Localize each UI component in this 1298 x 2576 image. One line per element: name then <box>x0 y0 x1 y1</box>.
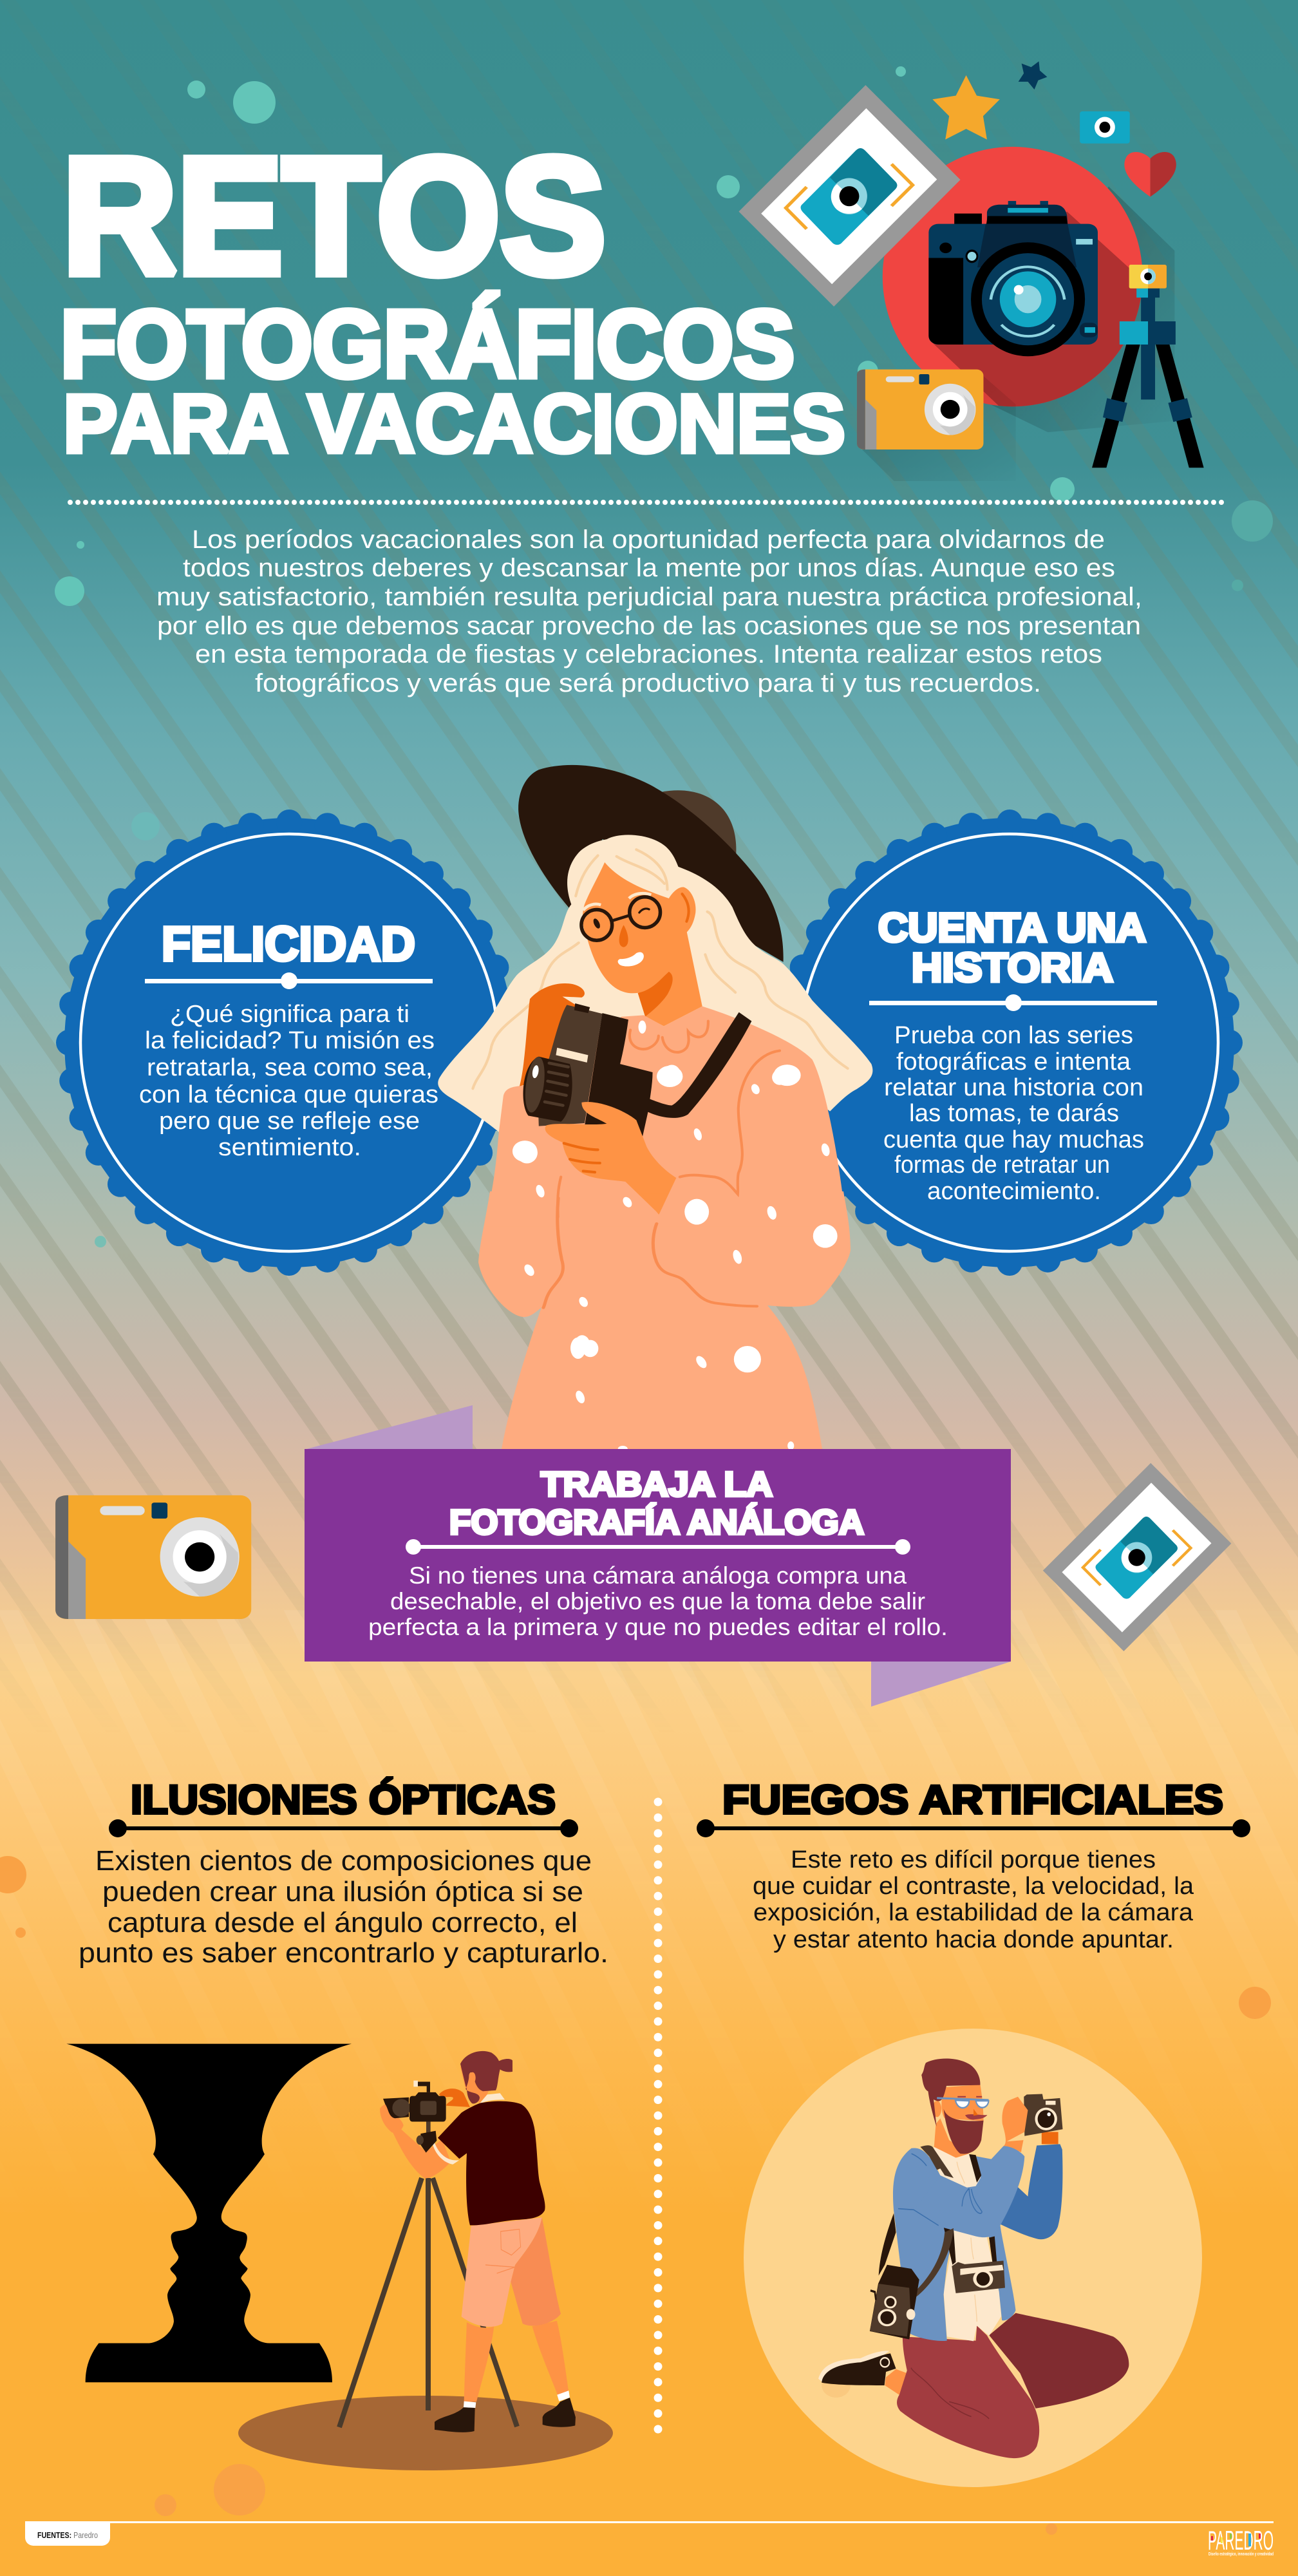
body text: Este reto es difícil porque tienes <box>791 1846 1156 1873</box>
divider <box>697 1819 1250 1837</box>
pale circle behind kneeling photographer <box>744 2029 1202 2487</box>
body text <box>883 1022 1144 1205</box>
heading <box>878 905 1146 990</box>
dress details <box>522 1193 838 1452</box>
body text <box>79 1845 608 1969</box>
icon: DSLR camera <box>928 201 1098 356</box>
body text: Prueba con las series <box>894 1022 1133 1049</box>
title line 3: PARA VACACIONES <box>63 378 845 470</box>
title <box>61 124 845 470</box>
title line 1: RETOS <box>62 124 606 308</box>
heading <box>449 1465 864 1542</box>
body text: pero que se refleje ese <box>159 1108 420 1135</box>
body text: cuenta que hay muchas <box>883 1126 1144 1153</box>
heading: TRABAJA LA <box>541 1465 773 1504</box>
icon: diamond camera right of banner <box>1043 1463 1231 1651</box>
icon: navy star <box>1019 61 1047 90</box>
heading: FUEGOS ARTIFICIALES <box>722 1777 1223 1823</box>
panel: trabaja la fotografía análoga <box>305 1449 1011 1662</box>
illustration: vase and faces optical illusion <box>66 2044 352 2382</box>
panel: ilusiones ópticas <box>79 1777 608 1969</box>
intro paragraph: en esta temporada de fiestas y celebraciones. Intenta realizar estos retos <box>195 640 1102 668</box>
body text: las tomas, te darás <box>909 1100 1119 1127</box>
red circle dark half <box>932 212 1147 410</box>
body text: formas de retratar un <box>894 1151 1110 1179</box>
tripod <box>339 2178 517 2427</box>
heading: FOTOGRAFÍA ANÁLOGA <box>449 1503 864 1542</box>
intro paragraph: por ello es que debemos sacar provecho de las ocasiones que se nos presentan <box>157 612 1141 640</box>
intro paragraph: todos nuestros deberes y descansar la mente por unos días. Aunque eso es <box>183 554 1115 582</box>
footer rule <box>110 2521 1274 2523</box>
body text: sentimiento. <box>218 1134 361 1161</box>
body text <box>368 1562 948 1640</box>
illustration: photographer with tripod <box>238 2051 613 2470</box>
body text: relatar una historia con <box>884 1074 1143 1101</box>
panel: felicidad badge <box>64 818 514 1267</box>
icon: small teal camera <box>1080 111 1130 144</box>
illustration: woman with camera <box>438 765 872 1452</box>
heading: ILUSIONES ÓPTICAS <box>131 1777 556 1823</box>
dotted column divider <box>654 1802 662 2445</box>
upper body <box>438 765 872 1227</box>
red circle <box>883 147 1143 406</box>
illustration: kneeling photographer with cameras <box>818 2059 1129 2458</box>
body text: fotográficas e intenta <box>896 1048 1131 1075</box>
divider <box>109 1819 578 1837</box>
divider <box>869 994 1157 1011</box>
dotted divider <box>70 500 1228 505</box>
heading: FELICIDAD <box>162 917 415 971</box>
yellow camera shadow <box>862 376 1016 481</box>
body text: pueden crear una ilusión óptica si se <box>102 1876 583 1908</box>
body text: Si no tienes una cámara análoga compra una <box>409 1562 907 1589</box>
intro paragraph: fotográficos y verás que será productivo para ti y tus recuerdos. <box>255 669 1041 697</box>
title line 2: FOTOGRÁFICOS <box>61 291 795 397</box>
body text: retratarla, sea como sea, <box>147 1054 433 1081</box>
icon: heart <box>1124 152 1176 197</box>
heading: HISTORIA <box>912 945 1113 990</box>
intro paragraph: Los períodos vacacionales son la oportunidad perfecta para olvidarnos de <box>192 526 1105 554</box>
icon: yellow compact camera <box>857 370 983 450</box>
body text: con la técnica que quieras <box>139 1081 438 1108</box>
panel: cuenta una historia badge <box>785 818 1234 1267</box>
body text: exposición, la estabilidad de la cámara <box>753 1899 1194 1926</box>
intro paragraph: muy satisfactorio, también resulta perjudicial para nuestra práctica profesional, <box>156 583 1142 611</box>
scalloped blue circle <box>785 818 1234 1267</box>
sources tag: FUENTES: Paredro <box>37 2531 98 2540</box>
heading: CUENTA UNA <box>878 905 1146 951</box>
sources tag <box>25 2521 110 2546</box>
decorative teal dots <box>55 66 1273 1247</box>
divider <box>145 972 433 989</box>
body text: ¿Qué significa para ti <box>170 1001 409 1028</box>
decorative orange dots <box>0 1856 1271 2535</box>
body text: la felicidad? Tu misión es <box>145 1027 435 1054</box>
body text: y estar atento hacia donde apuntar. <box>773 1926 1174 1953</box>
body text: que cuidar el contraste, la velocidad, la <box>753 1873 1194 1900</box>
scalloped blue circle <box>64 818 514 1267</box>
icon: gold star <box>932 75 1000 140</box>
long shadow <box>990 187 1174 432</box>
icon: diamond frame with camera <box>738 85 961 307</box>
photographer figure <box>380 2051 576 2432</box>
body text: acontecimiento. <box>927 1178 1101 1205</box>
panel: fuegos artificiales <box>697 1777 1250 1953</box>
icon: yellow camera left of banner <box>55 1495 251 1619</box>
lower dress <box>478 1191 851 1449</box>
intro paragraph <box>156 526 1142 697</box>
ground shadow <box>238 2396 613 2470</box>
body text: Existen cientos de composiciones que <box>95 1845 592 1877</box>
hero camera illustration <box>738 61 1204 481</box>
body text: perfecta a la primera y que no puedes editar el rollo. <box>368 1614 948 1640</box>
divider <box>406 1539 910 1555</box>
icon: tripod with camera <box>1092 265 1204 468</box>
small teal dot behind yellow camera <box>858 361 878 381</box>
body text <box>753 1846 1194 1953</box>
banner ribbon folds <box>306 1405 1011 1707</box>
body text <box>139 1001 438 1161</box>
body text: punto es saber encontrarlo y capturarlo. <box>79 1937 608 1969</box>
body text: desechable, el objetivo es que la toma debe salir <box>390 1588 925 1615</box>
body text: captura desde el ángulo correcto, el <box>108 1907 578 1938</box>
